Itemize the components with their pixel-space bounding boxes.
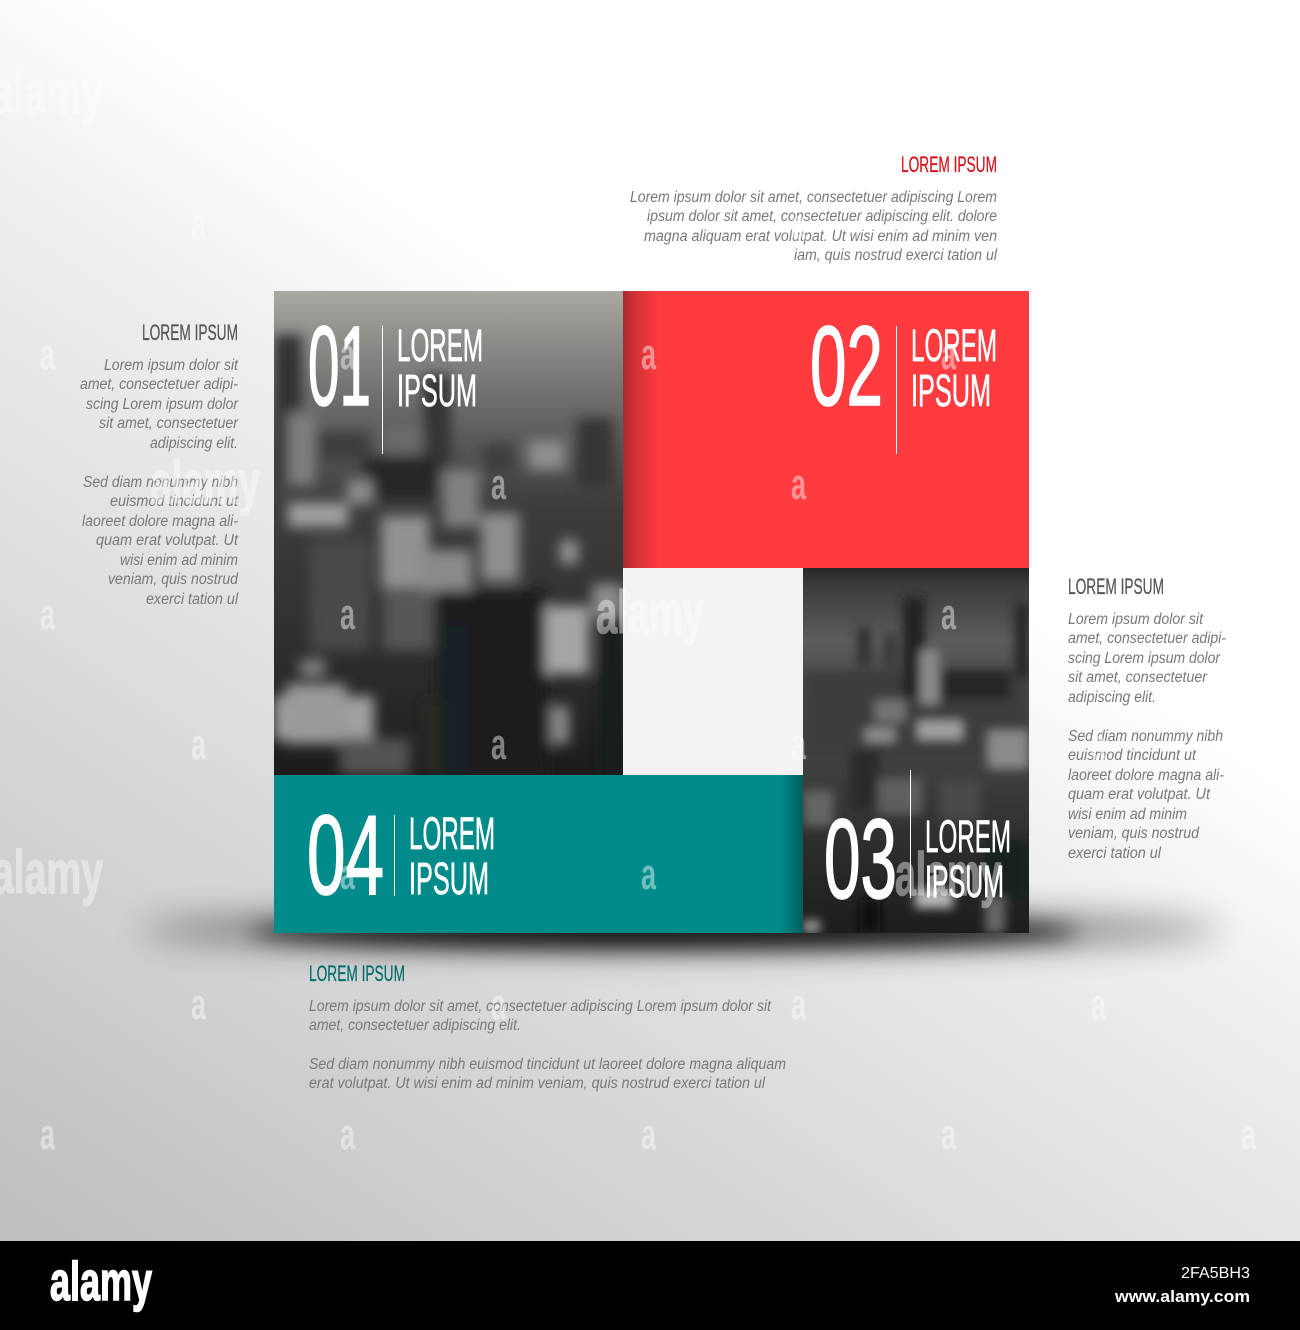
footer image id: 2FA5BH3 (1181, 1265, 1250, 1282)
label 03: IPSUM (925, 856, 1004, 907)
text block: left (80, 320, 239, 608)
watermark overlay: a (941, 1110, 956, 1159)
text block: top (red): iam, quis nostrud exerci tation ul (794, 247, 998, 264)
text block: left: scing Lorem ipsum dolor (86, 396, 239, 413)
label 01: LOREM (397, 320, 483, 371)
text block: top (red) (630, 152, 998, 264)
watermark overlay: a (340, 850, 355, 899)
text block: left: veniam, quis nostrud (108, 571, 239, 588)
watermark overlay: a (491, 200, 506, 249)
text block: top (red): magna aliquam erat volutpat. Ut wisi enim ad minim ven (644, 228, 997, 245)
text block: left: adipiscing elit. (150, 435, 238, 452)
watermark overlay (0, 59, 1256, 1159)
watermark overlay: a (191, 980, 206, 1029)
watermark overlay: a (40, 1110, 55, 1159)
label 04: 04 (307, 792, 384, 918)
text block: left: Sed diam nonummy nibh (83, 474, 238, 491)
watermark overlay: alamy (895, 841, 1001, 908)
text block: left: laoreet dolore magna ali- (82, 513, 238, 530)
watermark overlay: alamy (596, 579, 704, 646)
text block: top (red): ipsum dolor sit amet, consectetuer adipiscing elit. dolore (647, 208, 997, 225)
text block: right: wisi enim ad minim (1068, 806, 1187, 823)
text block: left: amet, consectetuer adipi- (80, 376, 238, 393)
label 01 (308, 303, 483, 454)
label 02: LOREM (911, 320, 997, 371)
watermark overlay: a (40, 590, 55, 639)
label 04 (307, 792, 495, 918)
watermark overlay: a (641, 850, 656, 899)
watermark overlay: a (340, 330, 355, 379)
text block: right (1068, 574, 1226, 862)
watermark overlay: a (641, 70, 656, 119)
footer url: www.alamy.com (1114, 1287, 1250, 1306)
text block: right: Sed diam nonummy nibh (1068, 728, 1223, 745)
watermark overlay: a (941, 590, 956, 639)
text block: right: amet, consectetuer adipi- (1068, 630, 1226, 647)
watermark overlay: a (491, 460, 506, 509)
watermark overlay: a (791, 200, 806, 249)
text block: bottom (teal): Lorem ipsum dolor sit amet, consectetuer adipiscing Lorem ipsum dolor sit (309, 998, 772, 1015)
label 04: LOREM (409, 808, 495, 859)
label 02: IPSUM (911, 365, 991, 416)
label 01: 01 (308, 303, 371, 429)
text block: right: quam erat volutpat. Ut (1068, 786, 1211, 803)
text block: right: sit amet, consectetuer (1068, 669, 1208, 686)
text block: left: euismod tincidunt ut (110, 493, 239, 510)
text block: bottom (teal): erat volutpat. Ut wisi enim ad minim veniam, quis nostrud exerci tation ul (309, 1075, 766, 1092)
watermark overlay: a (340, 1110, 355, 1159)
watermark overlay: a (340, 590, 355, 639)
watermark overlay: a (1091, 720, 1106, 769)
text block: right: Lorem ipsum dolor sit (1068, 611, 1204, 628)
text block: right: veniam, quis nostrud (1068, 825, 1200, 842)
label 02 (810, 303, 997, 454)
panel 02: red block (623, 291, 1029, 568)
watermark overlay: a (941, 330, 956, 379)
text block: left: Lorem ipsum dolor sit (104, 357, 239, 374)
label 03: LOREM (925, 811, 1011, 862)
text block: bottom (teal): amet, consectetuer adipiscing elit. (309, 1017, 521, 1034)
watermark overlay: a (641, 330, 656, 379)
watermark overlay: alamy (150, 449, 260, 516)
footer logo: alamy (50, 1250, 152, 1312)
heading: right: LOREM IPSUM (1068, 574, 1164, 599)
text block: left: wisi enim ad minim (120, 552, 238, 569)
watermark overlay: a (191, 200, 206, 249)
panel 03: city photo (803, 568, 1029, 933)
watermark overlay: a (1241, 1110, 1256, 1159)
watermark overlay: a (491, 720, 506, 769)
text block: left: quam erat volutpat. Ut (96, 532, 239, 549)
heading: top: LOREM IPSUM (901, 152, 997, 177)
footer bar (0, 1241, 1300, 1330)
label 03: 03 (824, 796, 897, 922)
watermark overlay: a (40, 330, 55, 379)
text block: right: adipiscing elit. (1068, 689, 1156, 706)
label 03 (824, 770, 1011, 922)
watermark overlay: a (791, 980, 806, 1029)
label 04: IPSUM (409, 853, 489, 904)
watermark overlay: a (641, 1110, 656, 1159)
text block: left: exerci tation ul (146, 591, 239, 608)
watermark overlay: a (1091, 980, 1106, 1029)
text block: bottom (teal) (309, 961, 786, 1092)
text block: left: sit amet, consectetuer (99, 415, 239, 432)
watermark overlay: a (491, 980, 506, 1029)
watermark overlay: a (340, 70, 355, 119)
watermark overlay: alamy (1040, 449, 1150, 516)
text block: right: exerci tation ul (1068, 845, 1162, 862)
text block: right: laoreet dolore magna ali- (1068, 767, 1224, 784)
heading: bottom: LOREM IPSUM (309, 961, 405, 986)
label 01: IPSUM (397, 365, 477, 416)
heading: left: LOREM IPSUM (142, 320, 238, 345)
text block: right: scing Lorem ipsum dolor (1068, 650, 1221, 667)
watermark overlay: a (791, 720, 806, 769)
text block: bottom (teal): Sed diam nonummy nibh euismod tincidunt ut laoreet dolore magna aliquam (309, 1056, 786, 1073)
watermark overlay: a (791, 460, 806, 509)
label 02: 02 (810, 303, 883, 429)
text block: top (red): Lorem ipsum dolor sit amet, consectetuer adipiscing Lorem (630, 189, 997, 206)
ground shadow (140, 908, 1220, 952)
panel 01: city photo (274, 291, 623, 780)
center white block (623, 568, 803, 775)
panel 04: teal block (274, 775, 803, 933)
watermark overlay: a (191, 720, 206, 769)
text block: right: euismod tincidunt ut (1068, 747, 1197, 764)
